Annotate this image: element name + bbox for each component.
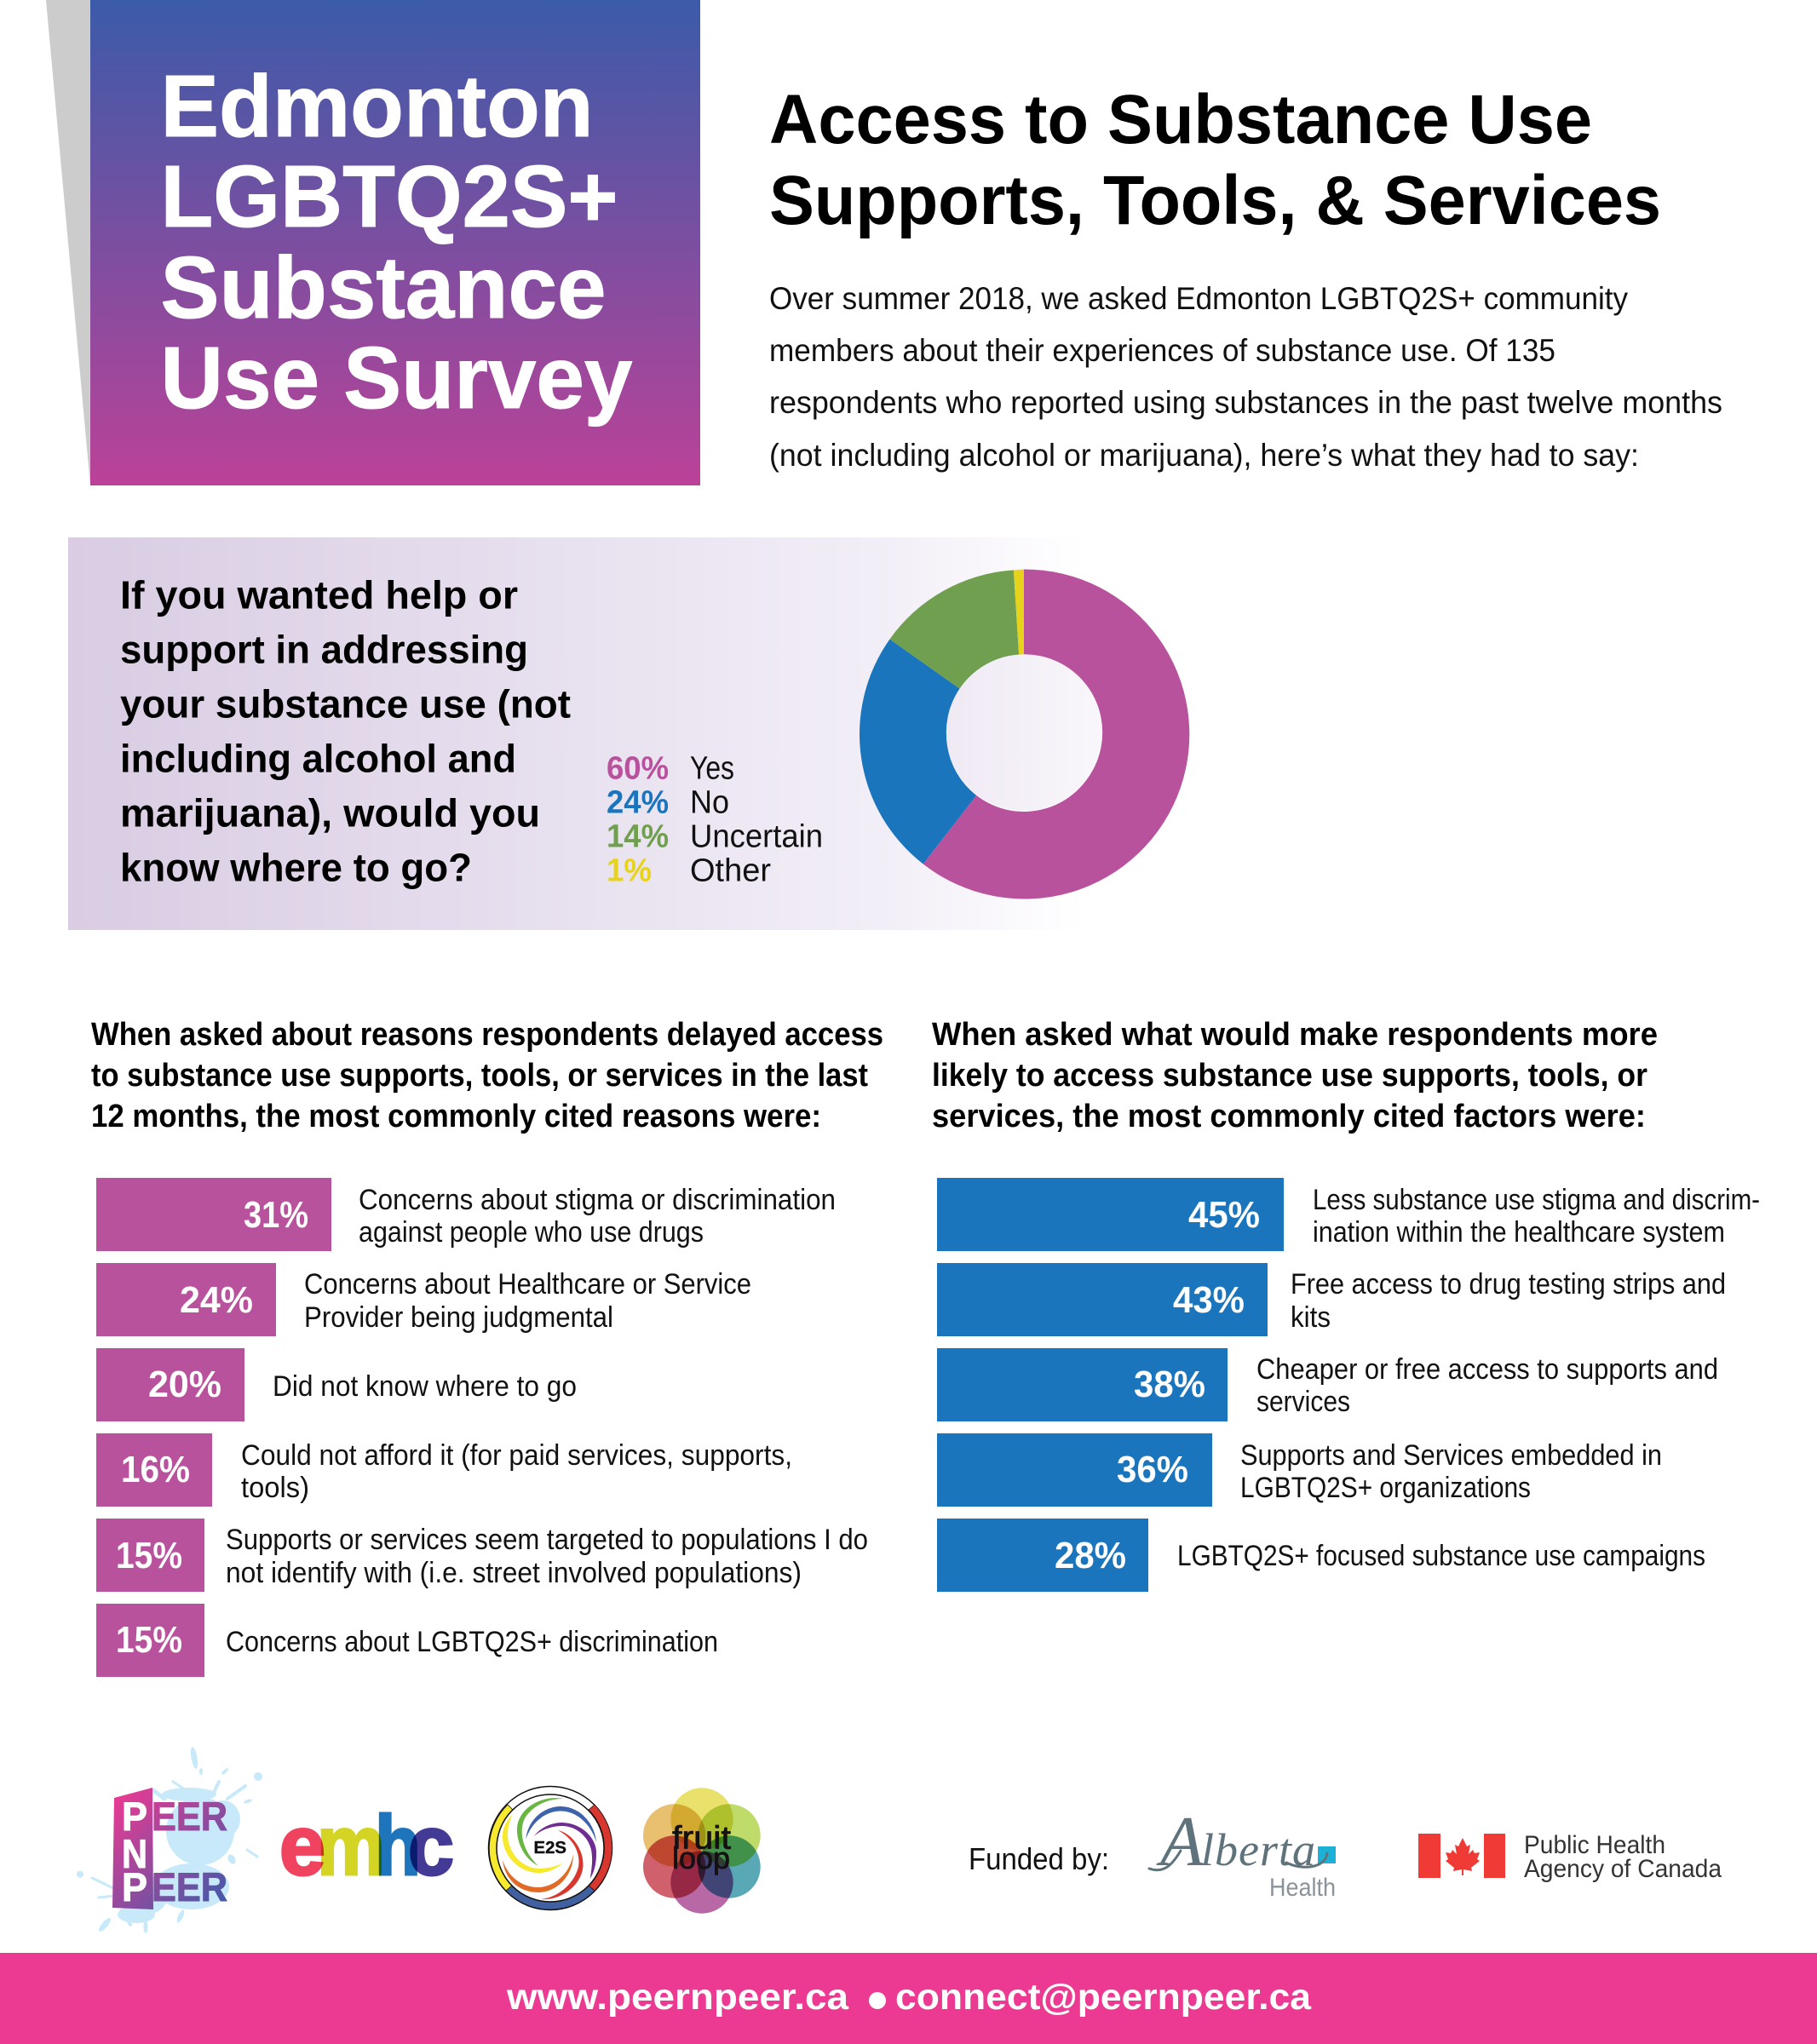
panel: know where to go	[68, 537, 1189, 930]
bar 15% targeted: 15%	[116, 1535, 182, 1576]
bar 36%: 36%	[1117, 1449, 1188, 1490]
bar 31%: against people who use drugs	[359, 1216, 704, 1249]
bar 20%	[96, 1348, 577, 1421]
donut legend: Uncertain	[690, 819, 823, 855]
question text	[120, 572, 571, 889]
intro paragraph: members about their experiences of substance use. Of 135	[769, 333, 1555, 368]
bar 24%	[96, 1263, 751, 1336]
bar 15% discrimination	[96, 1604, 718, 1677]
intro paragraph: Over summer 2018, we asked Edmonton LGBTQ2S+ community	[769, 281, 1628, 316]
bar 28%: 28%	[1055, 1535, 1126, 1576]
bar 43%: 43%	[1173, 1279, 1245, 1321]
donut legend: No	[690, 785, 729, 821]
banner title text	[160, 57, 632, 427]
bar 36%	[937, 1433, 1662, 1507]
logo: Alberta Health: lberta	[1201, 1824, 1316, 1875]
bar 45%: ination within the healthcare system	[1313, 1216, 1725, 1249]
question text: If you wanted help or	[120, 572, 518, 617]
logo: Peer N Peer: N	[122, 1831, 147, 1876]
bar chart: delay reasons	[96, 1178, 868, 1677]
logo: emhc: e	[279, 1798, 325, 1892]
bar 36%: LGBTQ2S+ organizations	[1240, 1472, 1531, 1504]
donut legend	[607, 751, 823, 889]
bar 16%: 16%	[121, 1449, 190, 1490]
bar 31%: Concerns about stigma or discrimination	[359, 1184, 836, 1216]
logo: fruit loop	[643, 1788, 761, 1914]
banner title text: LGBTQ2S+	[160, 147, 618, 245]
heading: what would help: services, the most commonly cited factors were:	[932, 1099, 1646, 1134]
footer bar	[0, 1953, 1817, 2044]
logo: emhc: m	[317, 1798, 385, 1892]
question text: including alcohol and	[120, 736, 516, 780]
logo: Peer N Peer	[77, 1747, 262, 1933]
bar 31%: 31%	[244, 1194, 308, 1236]
bar 28%	[937, 1519, 1705, 1592]
title banner	[46, 0, 700, 485]
logo: emhc	[279, 1798, 454, 1892]
logo: Public Health Agency of Canada: Public Health	[1524, 1831, 1665, 1859]
logo: E2S: E2S	[533, 1839, 566, 1857]
heading: reasons for delay	[91, 1017, 883, 1134]
bar 43%: Free access to drug testing strips and	[1291, 1268, 1726, 1300]
logo: Peer N Peer: EER	[152, 1794, 227, 1839]
bar 15% discrimination: Concerns about LGBTQ2S+ discrimination	[226, 1626, 718, 1658]
bar 16%: tools)	[241, 1472, 309, 1504]
bar 45%	[937, 1178, 1760, 1251]
bar 15% targeted	[96, 1519, 868, 1592]
bar 24%: Provider being judgmental	[304, 1301, 613, 1334]
logo: emhc: c	[408, 1798, 454, 1892]
bar 31%	[96, 1178, 836, 1251]
banner title text: Use Survey	[160, 329, 632, 427]
bar 38%: 38%	[1134, 1364, 1205, 1405]
question text: marijuana), would you	[120, 790, 540, 835]
funded by label: Funded by:	[969, 1841, 1109, 1876]
donut chart	[860, 569, 1189, 899]
intro paragraph: (not including alcohol or marijuana), here’s what they had to say:	[769, 438, 1639, 473]
bar 20%: 20%	[148, 1364, 221, 1405]
logo: fruit loop: loop	[672, 1840, 730, 1875]
donut legend: 60%	[607, 751, 669, 787]
logo: fruit loop: fruit	[672, 1821, 731, 1857]
bar 15% discrimination: 15%	[116, 1619, 182, 1661]
logo: Peer N Peer: EER	[152, 1864, 227, 1909]
bar 28%: LGBTQ2S+ focused substance use campaigns	[1177, 1540, 1705, 1572]
donut legend: 1%	[607, 853, 652, 889]
logo: Alberta Health	[1149, 1802, 1336, 1902]
banner title text: Edmonton	[160, 57, 593, 155]
bar 38%: services	[1256, 1386, 1350, 1418]
bar 15% targeted: not identify with (i.e. street involved populations)	[226, 1557, 802, 1589]
bar 36%: Supports and Services embedded in	[1240, 1439, 1662, 1472]
question text: your substance use (not	[120, 681, 571, 726]
main heading: Supports, Tools, & Services	[769, 162, 1661, 239]
question text: support in addressing	[120, 627, 528, 671]
bar 24%: Concerns about Healthcare or Service	[304, 1268, 751, 1300]
bar 43%	[937, 1263, 1726, 1336]
question text: know where to go?	[120, 845, 472, 889]
donut legend: Other	[690, 853, 771, 889]
logo: Public Health Agency of Canada: Agency of Canada	[1524, 1855, 1722, 1883]
heading: reasons for delay: 12 months, the most commonly cited reasons were:	[91, 1099, 821, 1134]
intro paragraph: respondents who reported using substances in the past twelve months	[769, 385, 1722, 420]
donut legend: Yes	[690, 751, 734, 787]
heading: reasons for delay: When asked about reasons respondents delayed access	[91, 1017, 883, 1053]
heading: what would help: likely to access substance use supports, tools, or	[932, 1058, 1647, 1094]
donut legend: 14%	[607, 819, 669, 855]
heading: what would help: When asked what would make respondents more	[932, 1017, 1658, 1053]
bar 20%: Did not know where to go	[273, 1370, 577, 1403]
bar 38%	[937, 1348, 1718, 1421]
footer website: www.peernpeer.ca	[506, 1977, 849, 2018]
intro paragraph	[769, 281, 1722, 473]
logo: Peer N Peer: P	[122, 1864, 147, 1909]
bar 16%: Could not afford it (for paid services, supports,	[241, 1439, 792, 1472]
logo: Alberta Health: Health	[1269, 1874, 1336, 1902]
bar 15% targeted: Supports or services seem targeted to populations I do	[226, 1524, 868, 1556]
banner title text: Substance	[160, 238, 607, 336]
main heading	[769, 81, 1661, 239]
logo: E2S	[489, 1787, 612, 1909]
bar 38%: Cheaper or free access to supports and	[1256, 1353, 1718, 1386]
logo: Public Health Agency of Canada	[1418, 1831, 1722, 1883]
heading: reasons for delay: to substance use supports, tools, or services in the last	[91, 1058, 868, 1094]
bar 45%: 45%	[1188, 1194, 1260, 1236]
logo: Alberta Health: A	[1156, 1802, 1205, 1881]
heading: what would help	[932, 1017, 1658, 1134]
footer email: connect@peernpeer.ca	[895, 1977, 1312, 2018]
footer bullet	[869, 1992, 886, 2009]
bar 16%	[96, 1433, 792, 1507]
bar 45%: Less substance use stigma and discrim-	[1313, 1184, 1760, 1216]
bar 43%: kits	[1291, 1301, 1331, 1334]
donut legend: 24%	[607, 785, 669, 821]
bar chart: access factors	[937, 1178, 1760, 1592]
main heading: Access to Substance Use	[769, 81, 1592, 158]
logo: Peer N Peer: P	[122, 1794, 147, 1839]
logo: emhc: h	[375, 1798, 421, 1892]
bar 24%: 24%	[180, 1279, 253, 1321]
